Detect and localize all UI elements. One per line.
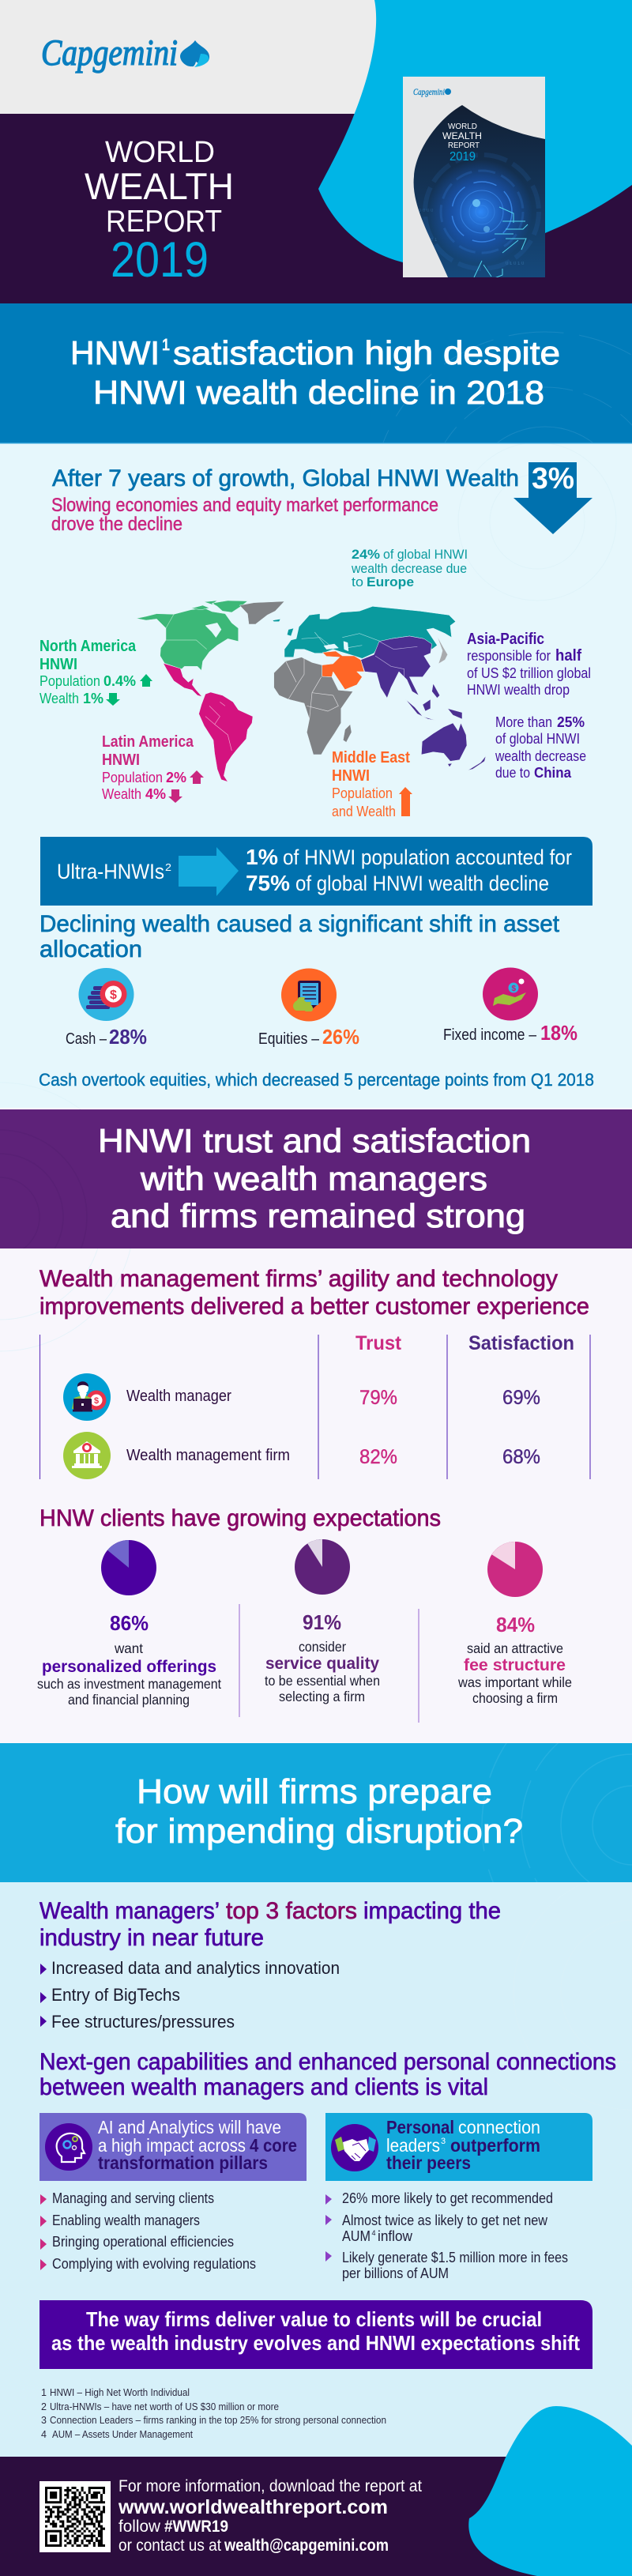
arrow: 3% decrease xyxy=(514,462,592,534)
heading: top 3 factors: impacting the xyxy=(363,1898,501,1924)
list: connection leaders benefits: AUM xyxy=(342,2228,371,2244)
callout: China: wealth decrease xyxy=(495,748,586,764)
values: 79% xyxy=(359,1387,397,1409)
heading: growing expectations: HNW clients have growing expectations xyxy=(40,1505,441,1531)
heading: top 3 factors: industry in near future xyxy=(40,1925,264,1951)
report cover: REPORT xyxy=(448,141,480,150)
list: connection leaders benefits: Likely generate $1.5 million more in fees xyxy=(342,2249,568,2265)
callout: Asia-Pacific xyxy=(467,631,591,698)
heading: next-gen capabilities: between wealth managers and clients is vital xyxy=(40,2074,488,2100)
callout: North America: HNWI xyxy=(40,656,77,673)
stat: 84% fee structure xyxy=(457,1613,572,1706)
stat: 86% personalized offerings: 86% xyxy=(110,1611,149,1635)
heading: next-gen capabilities: Next-gen capabilities and enhanced personal connections xyxy=(40,2049,616,2075)
footer text: #WWR19 xyxy=(164,2518,228,2536)
list: top 3 factors: Entry of BigTechs xyxy=(51,1985,180,2005)
table: trust and satisfaction: Satisfaction xyxy=(468,1332,574,1354)
callout: Middle East xyxy=(332,749,412,819)
list: connection leaders benefits: Almost twice as likely to get net new xyxy=(342,2212,548,2228)
callout: Latin America: Wealth xyxy=(102,786,141,802)
stat: 84% fee structure: was important while xyxy=(457,1674,572,1690)
footer text: For more information, download the report at xyxy=(118,2477,422,2495)
panel: AI and analytics xyxy=(40,2113,307,2181)
callout: Latin America: 2% xyxy=(166,770,186,785)
panel: personal connection leaders: their peers xyxy=(386,2152,471,2173)
list: transformation pillars: Complying with evolving regulations xyxy=(52,2255,256,2272)
callout: Europe: wealth decrease due xyxy=(351,561,467,576)
stat: 84% fee structure: 84% xyxy=(496,1613,535,1636)
pie chart: 86% xyxy=(101,1540,156,1595)
subheading: slowing economies: drove the decline xyxy=(51,514,182,535)
panel: Ultra-HNWIs: 1% xyxy=(246,845,278,869)
callout: Europe: to xyxy=(352,574,363,589)
heading: asset allocation: allocation xyxy=(40,936,142,962)
list: transformation pillars: Enabling wealth managers xyxy=(52,2212,200,2228)
heading: top 3 factors: Wealth managers’ xyxy=(40,1898,220,1924)
panel: personal connection leaders: Personal xyxy=(386,2117,454,2137)
world map xyxy=(136,601,486,781)
table: trust and satisfaction xyxy=(40,1332,590,1479)
footer panel xyxy=(0,2406,632,2576)
panel: personal connection leaders: outperform xyxy=(450,2135,540,2156)
panel: Ultra-HNWIs: 75% xyxy=(246,871,290,895)
icon: cash: $ xyxy=(110,989,117,1002)
stat: 86% personalized offerings: and financial planning xyxy=(68,1692,190,1708)
list: connection leaders benefits: 4 xyxy=(371,2229,376,2237)
title: World Wealth Report 2019: WORLD xyxy=(105,136,215,169)
icon: fixed income xyxy=(483,967,538,1021)
panel: Ultra-HNWIs xyxy=(40,837,592,906)
callout: delivering value: as the wealth industry evolves and HNWI expectations shift xyxy=(51,2331,580,2355)
stat: 91% service quality: 91% xyxy=(303,1610,341,1634)
section banner: trust and satisfaction: with wealth managers xyxy=(140,1160,487,1197)
logo: Capgemini: Capgemini xyxy=(41,32,178,73)
footer text: www.worldwealthreport.com xyxy=(118,2496,388,2518)
report cover: WORLD xyxy=(448,122,477,131)
region: Middle East xyxy=(322,651,364,690)
title: World Wealth Report 2019: 2019 xyxy=(111,232,209,288)
callout: Europe: 24% xyxy=(352,547,380,562)
values: 82% xyxy=(359,1446,397,1468)
stat: 86% personalized offerings: personalized offerings xyxy=(42,1658,216,1676)
callout: Asia-Pacific: half xyxy=(555,647,581,665)
list: transformation pillars: Bringing operational efficiencies xyxy=(52,2233,234,2250)
heading: top 3 factors: top 3 factors xyxy=(226,1898,357,1924)
list: connection leaders benefits: per billions of AUM xyxy=(342,2265,449,2281)
text: cash overtook equities: Cash overtook equities, which decreased 5 percentage points from Q1 2018 xyxy=(39,1070,594,1090)
callout: Latin America: Latin America xyxy=(102,733,194,751)
section banner: HNWI satisfaction xyxy=(0,303,632,443)
icon: wealth manager: $ xyxy=(94,1396,99,1406)
title: World Wealth Report 2019: WEALTH xyxy=(85,165,234,207)
footnotes: 2 xyxy=(41,2401,47,2412)
stat: 84% fee structure: choosing a firm xyxy=(472,1690,558,1706)
report cover: WEALTH xyxy=(442,130,482,141)
panel: Ultra-HNWIs: of HNWI population accounted for xyxy=(283,845,572,869)
callout: Middle East: HNWI xyxy=(332,767,370,785)
stat: 84% fee structure: fee structure xyxy=(464,1656,566,1674)
section banner: HNWI satisfaction: satisfaction high despite xyxy=(173,334,560,371)
list: transformation pillars xyxy=(40,2190,256,2272)
list: connection leaders benefits: 26% more likely to get recommended xyxy=(342,2190,553,2206)
panel: personal connection leaders: leaders xyxy=(386,2135,440,2156)
subheading: slowing economies: Slowing economies and equity market performance xyxy=(51,495,438,516)
callout: North America xyxy=(40,638,152,706)
label: fixed income 18%: Fixed income – xyxy=(443,1026,537,1044)
values xyxy=(359,1387,540,1468)
icon: wealth management firm xyxy=(63,1432,111,1479)
heading: asset allocation: Declining wealth caused a significant shift in asset xyxy=(40,911,560,937)
values: 69% xyxy=(502,1387,540,1409)
callout: North America: 1% xyxy=(83,691,103,706)
report cover: 0 1 0 1 0 xyxy=(506,262,525,266)
section banner: HNWI satisfaction: 1 xyxy=(162,337,170,354)
callout: delivering value xyxy=(40,2300,592,2369)
subheading: slowing economies xyxy=(51,495,438,535)
section banner: trust and satisfaction: HNWI trust and satisfaction xyxy=(98,1122,531,1159)
label: wealth manager: Wealth manager xyxy=(126,1388,231,1405)
stat: 86% personalized offerings: such as investment management xyxy=(37,1676,221,1692)
region: Europe and Russia xyxy=(273,606,456,658)
callout: Europe xyxy=(351,547,468,589)
section banner: impending disruption: for impending disruption? xyxy=(115,1812,523,1851)
panel: personal connection leaders xyxy=(325,2113,592,2181)
footnotes xyxy=(41,2387,386,2440)
table: trust and satisfaction: Trust xyxy=(356,1332,402,1354)
footer text: follow xyxy=(118,2518,161,2536)
panel: Ultra-HNWIs: 2 xyxy=(165,861,171,873)
heading: agility and technology: Wealth management firms’ agility and technology xyxy=(40,1266,558,1292)
stat: 84% fee structure: said an attractive xyxy=(467,1640,563,1656)
callout: Europe: Europe xyxy=(367,574,414,589)
icon: handshake xyxy=(331,2124,378,2171)
region: Latin America xyxy=(164,663,253,781)
report cover: 0 0 0 0 xyxy=(419,209,434,213)
label: cash 28%: 28% xyxy=(109,1025,147,1049)
section banner: HNWI satisfaction: HNWI xyxy=(70,334,160,371)
label: fixed income 18%: 18% xyxy=(540,1021,577,1045)
callout: China: 25% xyxy=(557,714,585,730)
footer cyan shape xyxy=(468,2406,632,2576)
section banner: trust and satisfaction xyxy=(0,1109,632,1248)
list: connection leaders benefits xyxy=(325,2190,568,2281)
QR code xyxy=(40,2481,111,2552)
callout: China: More than xyxy=(495,714,552,730)
callout: North America: Population xyxy=(40,673,100,689)
region: North America xyxy=(136,601,247,670)
callout: delivering value: The way firms deliver value to clients will be crucial xyxy=(86,2307,542,2331)
label: equities 26%: 26% xyxy=(322,1025,359,1049)
panel: Ultra-HNWIs: Ultra-HNWIs xyxy=(57,860,164,883)
list: connection leaders benefits: inflow xyxy=(378,2228,413,2244)
title: World Wealth Report 2019: REPORT xyxy=(106,205,222,239)
report cover xyxy=(403,77,545,278)
heading: next-gen capabilities xyxy=(40,2049,616,2100)
stat: 91% service quality: service quality xyxy=(265,1655,379,1673)
heading: top 3 factors xyxy=(40,1898,501,1951)
list: top 3 factors: Increased data and analytics innovation xyxy=(51,1958,340,1978)
footnotes: Connection Leaders – firms ranking in the top 25% for strong personal connection xyxy=(50,2415,386,2426)
panel: AI and analytics: a high impact across xyxy=(98,2135,246,2156)
heading: agility and technology: improvements delivered a better customer experience xyxy=(40,1294,589,1320)
callout: China: China xyxy=(534,765,572,781)
stat: 91% service quality xyxy=(265,1610,380,1704)
footer text xyxy=(118,2477,422,2555)
footnotes: AUM – Assets Under Management xyxy=(52,2429,193,2440)
stat: 86% personalized offerings xyxy=(37,1611,221,1708)
list: transformation pillars: Managing and serving clients xyxy=(52,2190,214,2206)
label: fixed income 18% xyxy=(443,1021,577,1045)
callout: Asia-Pacific: HNWI wealth drop xyxy=(467,682,570,698)
panel: Ultra-HNWIs: of global HNWI wealth decline xyxy=(295,872,549,895)
stat: 86% personalized offerings: want xyxy=(114,1640,143,1656)
icon: wealth manager xyxy=(63,1373,111,1421)
pie chart: 91% xyxy=(295,1539,350,1595)
icon: fixed income: $ xyxy=(512,985,517,993)
report cover: Capgemini xyxy=(413,86,445,97)
hero cyan curve xyxy=(318,0,632,266)
stat: 91% service quality: to be essential when xyxy=(265,1673,380,1689)
callout: Middle East: and Wealth xyxy=(332,804,396,819)
footnotes: 4 xyxy=(41,2429,47,2440)
panel: AI and analytics: transformation pillars xyxy=(98,2152,268,2173)
footnotes: Ultra-HNWIs – have net worth of US $30 million or more xyxy=(50,2401,279,2412)
list: top 3 factors xyxy=(40,1958,340,2032)
section banner: impending disruption: How will firms prepare xyxy=(137,1772,492,1811)
label: cash 28%: Cash – xyxy=(66,1030,107,1048)
heading: asset allocation xyxy=(40,911,560,962)
heading: global wealth: After 7 years of growth, Global HNWI Wealth xyxy=(52,465,519,491)
callout: Latin America: Population xyxy=(102,770,163,785)
icon: cash xyxy=(79,968,134,1021)
callout: Middle East: Population xyxy=(332,785,393,801)
callout: Middle East: Middle East xyxy=(332,749,410,766)
callout: Latin America xyxy=(102,733,204,803)
panel: AI and analytics: 4 core xyxy=(250,2135,297,2156)
footer text: wealth@capgemini.com xyxy=(224,2536,389,2555)
footnotes: 1 xyxy=(41,2387,47,2398)
panel: personal connection leaders: 3 xyxy=(441,2137,446,2146)
report cover: 2019 xyxy=(450,150,476,164)
label: wealth management firm: Wealth management firm xyxy=(126,1447,290,1464)
callout: Asia-Pacific: responsible for xyxy=(467,648,551,664)
callout: Europe: of global HNWI xyxy=(383,547,468,562)
title: World Wealth Report 2019 xyxy=(85,136,234,288)
footer text: or contact us at xyxy=(118,2536,221,2555)
panel: AI and analytics: AI and Analytics will have xyxy=(98,2117,281,2137)
heading: agility and technology xyxy=(40,1266,589,1320)
callout: Asia-Pacific: Asia-Pacific xyxy=(467,631,544,648)
section banner: HNWI satisfaction: HNWI wealth decline in 2018 xyxy=(93,374,544,411)
label: equities 26% xyxy=(258,1025,359,1049)
region: Asia-Pacific xyxy=(361,636,486,770)
label: cash 28% xyxy=(66,1025,147,1049)
panel: personal connection leaders: connection xyxy=(458,2117,540,2137)
callout: North America: Wealth xyxy=(40,691,79,706)
footnotes: HNWI – High Net Worth Individual xyxy=(50,2387,190,2398)
footnotes: 3 xyxy=(41,2415,47,2426)
callout: Asia-Pacific: of US $2 trillion global xyxy=(467,665,591,681)
section banner: impending disruption xyxy=(0,1743,632,1882)
callout: North America: 0.4% xyxy=(103,673,136,689)
callout: China: due to xyxy=(495,765,530,781)
callout: Latin America: HNWI xyxy=(102,751,140,769)
pie chart: 84% xyxy=(487,1542,543,1597)
section banner: trust and satisfaction: and firms remained strong xyxy=(111,1197,525,1234)
arrow: 3% decrease: 3% xyxy=(532,462,574,495)
values: 68% xyxy=(502,1446,540,1468)
icon: equities xyxy=(281,969,337,1021)
stat: 91% service quality: selecting a firm xyxy=(279,1689,365,1704)
callout: China xyxy=(495,714,586,781)
label: equities 26%: Equities – xyxy=(258,1030,320,1048)
report cover: 0 1 1 0 1 xyxy=(419,238,438,243)
list: top 3 factors: Fee structures/pressures xyxy=(51,2012,235,2032)
stat: 91% service quality: consider xyxy=(299,1639,346,1655)
callout: Latin America: 4% xyxy=(145,786,166,802)
callout: North America: North America xyxy=(40,638,137,655)
callout: China: of global HNWI xyxy=(495,731,580,747)
region: Greenland and Africa xyxy=(239,601,448,755)
icon: head with gears xyxy=(45,2123,92,2171)
